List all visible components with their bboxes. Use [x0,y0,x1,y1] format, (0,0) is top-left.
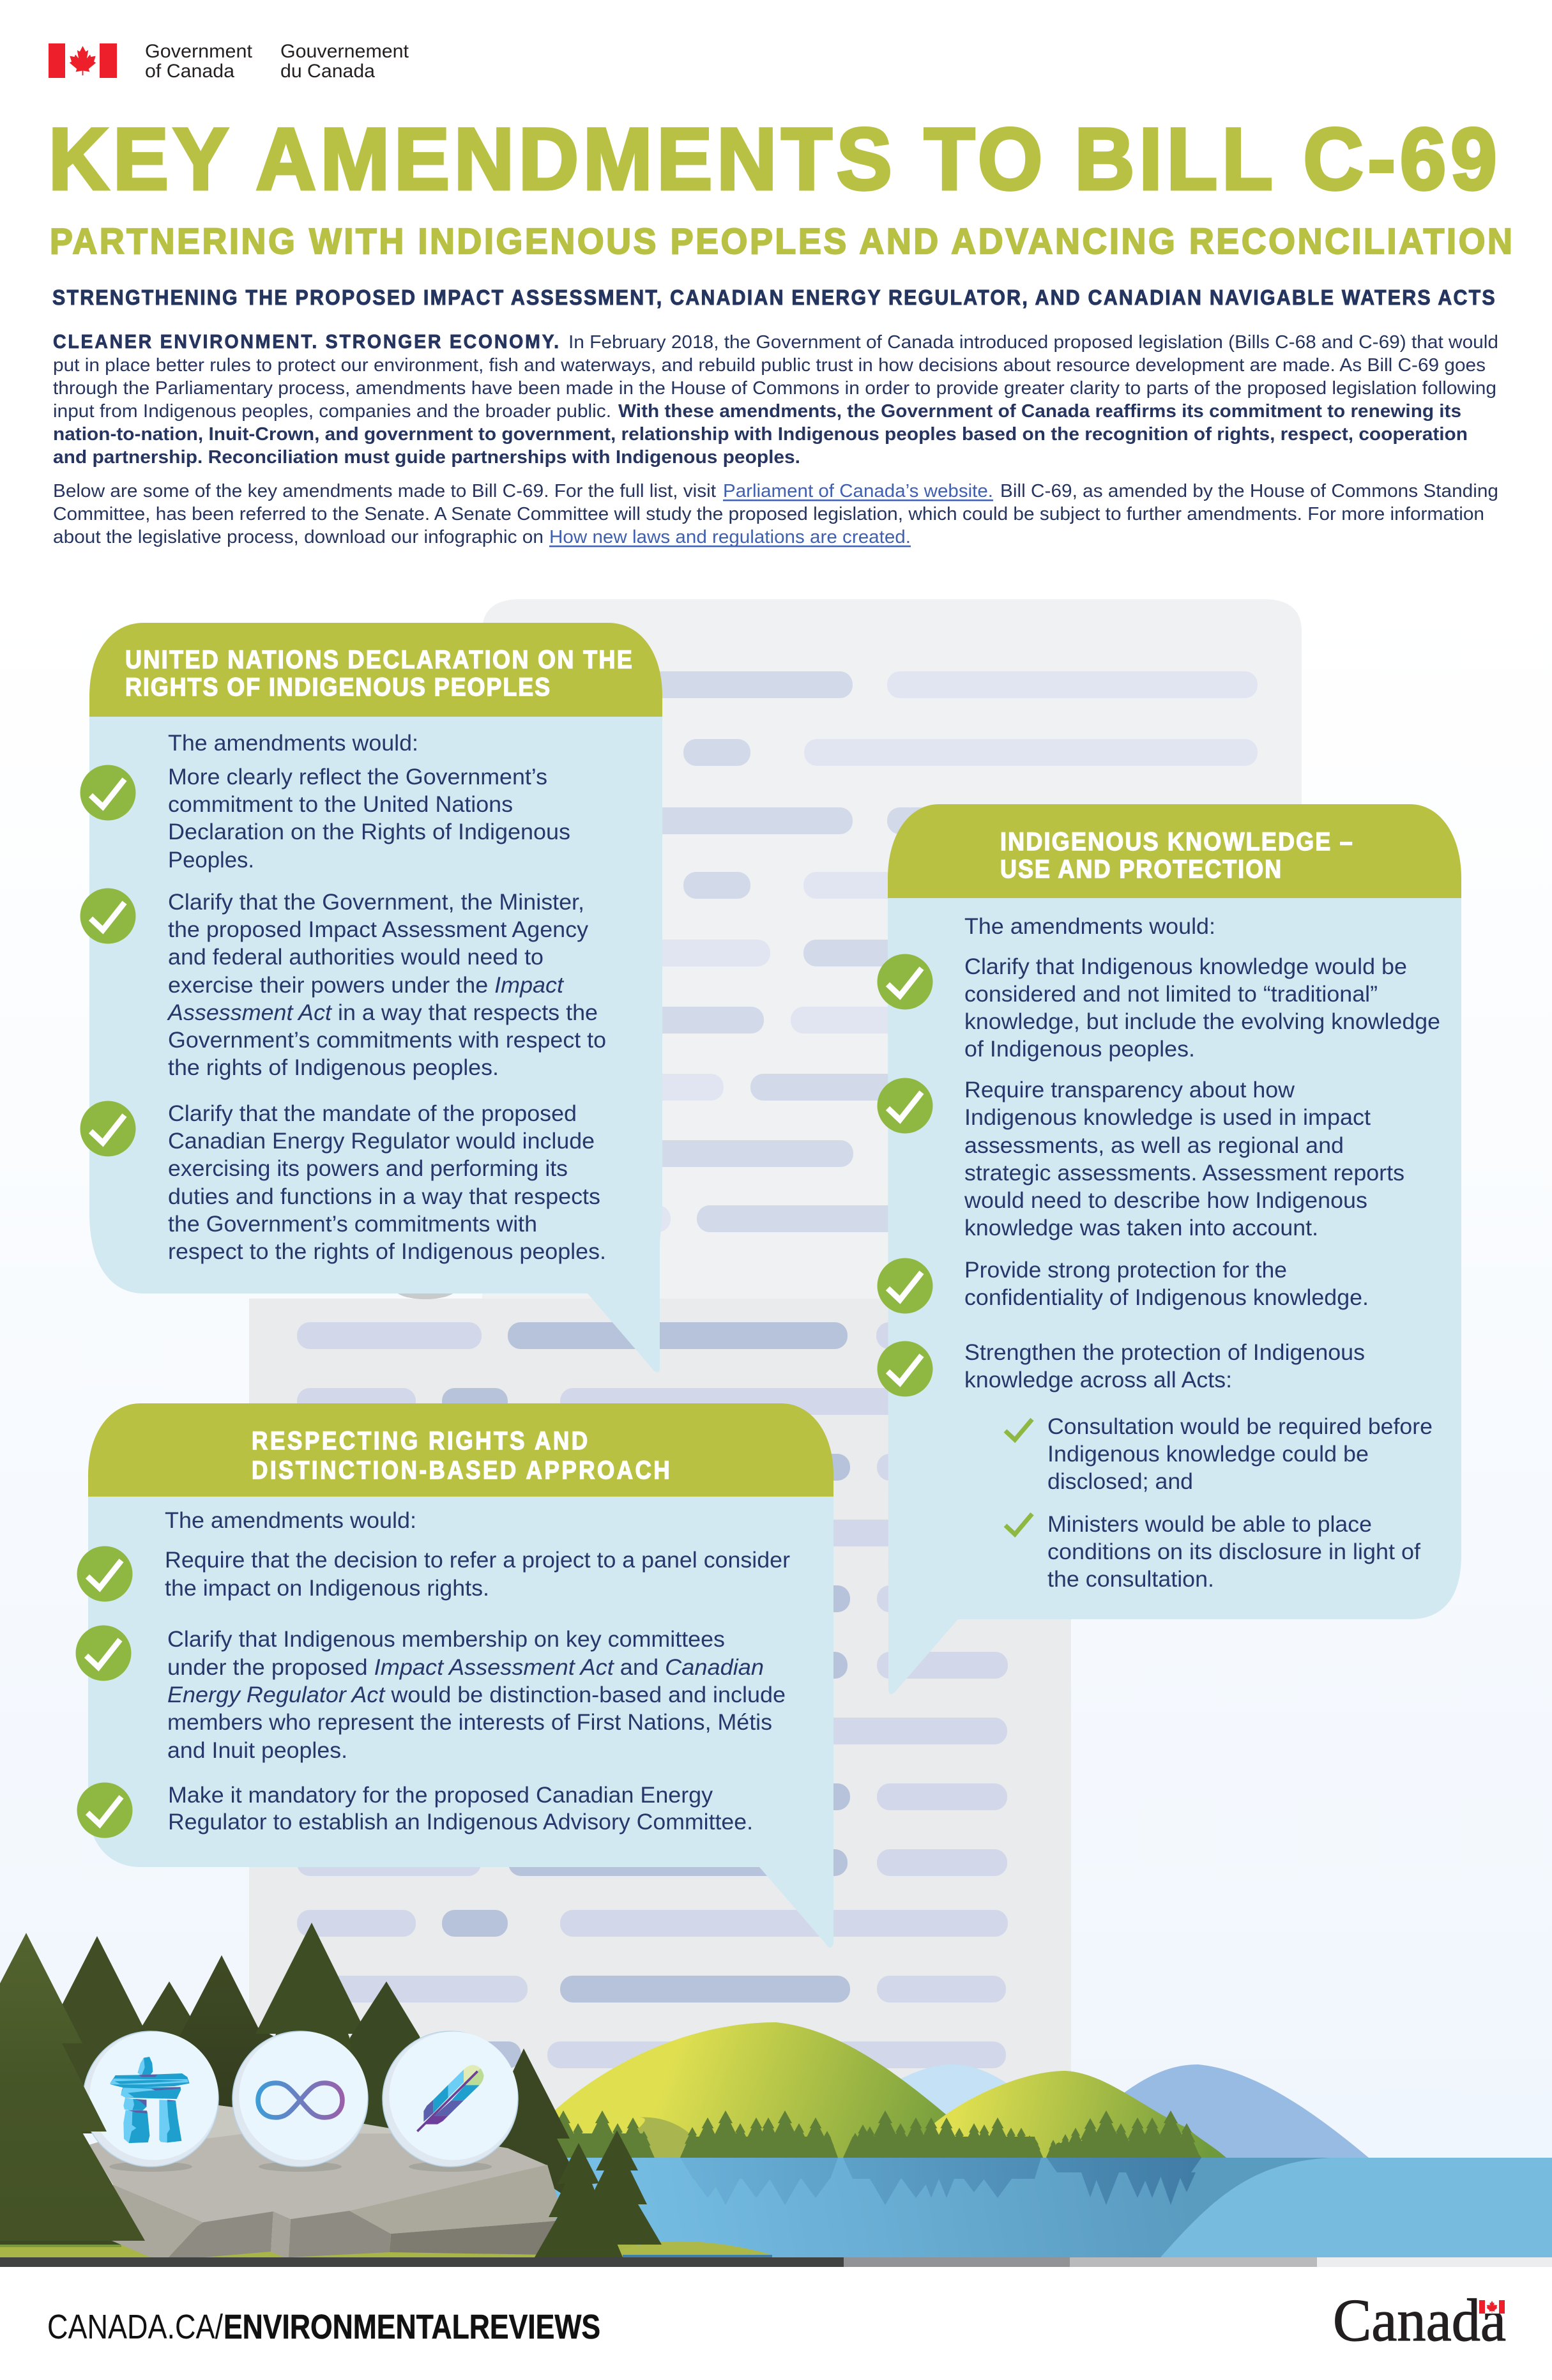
text block: conditions on its disclosure in light of [1047,1539,1420,1564]
background document panels [249,599,1302,2257]
text block: The amendments would: [168,731,418,756]
icon: checkmarks [75,1546,133,1838]
text block [165,1508,790,1835]
panel: Respecting Rights [75,1403,833,1948]
heading: DISTINCTION-BASED APPROACH [252,1456,670,1484]
logo: Government of Canada signature: Government [145,41,253,62]
text block: the proposed Impact Assessment Agency [168,917,589,942]
text block [167,731,606,1264]
text block: respect to the rights of Indigenous peoples. [168,1239,606,1264]
legislative process paragraph with links: Parliament of Canada’s website. [723,481,993,501]
footer url: CANADA.CA/ [47,2308,223,2346]
icon: checkmarks [878,954,1032,1534]
foreground trees [0,1933,662,2257]
legislative process paragraph with links: How new laws and regulations are created. [549,527,911,547]
text block: disclosed; and [1047,1469,1193,1494]
heading: RIGHTS OF INDIGENOUS PEOPLES [125,673,550,701]
intro paragraph: CLEANER ENVIRONMENT. STRONGER ECONOMY. [53,331,559,353]
legislative process paragraph with links: Below are some of the key amendments made to Bill C-69. For the full list, visit [53,481,716,501]
intro paragraph: nation-to-nation, Inuit-Crown, and government to government, relationship with Indigenous peoples based on the recognition of rights, respect, cooperation [53,424,1468,445]
text block: and federal authorities would need to [168,945,544,970]
text block: considered and not limited to “traditional” [964,982,1378,1007]
text block: knowledge was taken into account. [964,1216,1318,1240]
logo: Government of Canada signature [49,41,409,82]
intro paragraph: input from Indigenous peoples, companies and the broader public. [53,401,611,422]
text block: the Government’s commitments with [168,1212,537,1237]
intro paragraph: put in place better rules to protect our environment, fish and waterways, and rebuild public trust in how decisions about resource development are made. As Bill C-69 goes [53,355,1486,376]
text block: Indigenous knowledge is used in impact [964,1105,1371,1130]
background dark forest [45,1923,597,2216]
legislative process paragraph with links: Committee, has been referred to the Senate. A Senate Committee will study the proposed legislation, which could be subject to further amendments. For more information [53,504,1484,524]
icon: infinity [232,2031,368,2172]
heading [125,646,632,701]
text block: under the proposed Impact Assessment Act and Canadian [167,1655,764,1680]
text block: strategic assessments. Assessment reports [964,1161,1404,1186]
intro paragraph: With these amendments, the Government of Canada reaffirms its commitment to renewing its [618,401,1461,422]
text block: Peoples. [168,848,254,873]
hills [505,2022,1369,2158]
heading: UNITED NATIONS DECLARATION ON THE [125,646,632,674]
text block: of Indigenous peoples. [964,1037,1195,1062]
footer url [47,2308,600,2346]
title: KEY AMENDMENTS TO BILL C-69 [49,111,1497,208]
text block: knowledge, but include the evolving knowledge [964,1009,1440,1034]
text block: assessments, as well as regional and [964,1133,1344,1158]
text block: Clarify that the Government, the Minister, [168,890,584,915]
logo: Government of Canada signature: du Canada [280,61,375,82]
text block: Declaration on the Rights of Indigenous [168,820,570,844]
heading [1000,828,1353,883]
logo: Canada wordmark: Canada [1333,2287,1506,2354]
text block: knowledge across all Acts: [964,1368,1232,1392]
text block: Clarify that the mandate of the proposed [168,1101,577,1126]
legislative process paragraph with links: about the legislative process, download our infographic on [53,527,544,547]
icon: feather [383,2031,518,2172]
text block: Require that the decision to refer a project to a panel consider [165,1548,790,1573]
intro paragraph: In February 2018, the Government of Canada introduced proposed legislation (Bills C-68 and C-69) that would [568,332,1498,353]
logo: Government of Canada signature: of Canada [145,61,234,82]
intro paragraph [53,331,1498,468]
tree reflection in the lake [680,2158,1201,2205]
panel: Indigenous Knowledge [878,804,1461,1694]
text block: Indigenous knowledge could be [1047,1442,1369,1467]
text block: Canadian Energy Regulator would include [168,1129,595,1154]
intro paragraph: and partnership. Reconciliation must guide partnerships with Indigenous peoples. [53,447,800,468]
footer url: ENVIRONMENTALREVIEWS [224,2308,600,2346]
icon: inukshuk [83,2031,218,2172]
text block: the rights of Indigenous peoples. [168,1055,499,1080]
text block: members who represent the interests of First Nations, Métis [167,1710,772,1735]
heading: INDIGENOUS KNOWLEDGE – [1000,828,1353,856]
legislative process paragraph with links: Bill C-69, as amended by the House of Commons Standing [1000,481,1498,501]
text block: Strengthen the protection of Indigenous [964,1340,1365,1365]
text block: Regulator to establish an Indigenous Advisory Committee. [168,1810,753,1835]
logo: Government of Canada signature: Gouvernement [280,41,409,62]
text block: would need to describe how Indigenous [964,1188,1367,1213]
lake [549,2158,1552,2257]
text block: Consultation would be required before [1047,1414,1433,1439]
text block: The amendments would: [964,914,1215,939]
text block: duties and functions in a way that respects [168,1184,600,1209]
legislative process paragraph with links [53,481,1498,547]
panel: United Nations Declaration [80,623,662,1372]
text block: the impact on Indigenous rights. [165,1576,489,1601]
heading: RESPECTING RIGHTS AND [252,1426,588,1454]
heading: USE AND PROTECTION [1000,855,1281,883]
icon: checkmarks [80,765,135,1156]
text block: confidentiality of Indigenous knowledge. [964,1285,1369,1310]
text block: and Inuit peoples. [167,1738,347,1763]
subheading: STRENGTHENING THE PROPOSED IMPACT ASSESSMENT, CANADIAN ENERGY REGULATOR, AND CANADIAN NAVIGABLE WATERS ACTS [52,286,1495,309]
text block: The amendments would: [165,1508,416,1533]
text block: exercise their powers under the Impact [168,973,564,998]
document text bars [297,671,1258,2068]
text block: More clearly reflect the Government’s [168,765,547,790]
intro paragraph: through the Parliamentary process, amendments have been made in the House of Commons in order to provide greater clarity to parts of the proposed legislation following [53,378,1496,399]
text block: Ministers would be able to place [1047,1512,1372,1537]
text block [964,914,1440,1592]
footer color bar [0,2257,1552,2267]
text block: Clarify that Indigenous knowledge would be [964,954,1407,979]
text block: Provide strong protection for the [964,1258,1287,1283]
ground strip [0,2241,772,2257]
text block: commitment to the United Nations [168,792,513,817]
text block: Assessment Act in a way that respects the [167,1000,598,1025]
heading [252,1426,670,1484]
text block: Government’s commitments with respect to [168,1028,606,1053]
distant tree line [544,2110,1201,2158]
rock [89,2105,558,2257]
text block: Clarify that Indigenous membership on key committees [167,1627,725,1652]
subtitle: PARTNERING WITH INDIGENOUS PEOPLES AND ADVANCING RECONCILIATION [50,220,1512,261]
text block: the consultation. [1047,1567,1214,1592]
text block: Energy Regulator Act would be distinction-based and include [167,1682,786,1707]
text block: Require transparency about how [964,1078,1295,1102]
text block: exercising its powers and performing its [168,1156,568,1181]
text block: Make it mandatory for the proposed Canadian Energy [168,1783,713,1808]
